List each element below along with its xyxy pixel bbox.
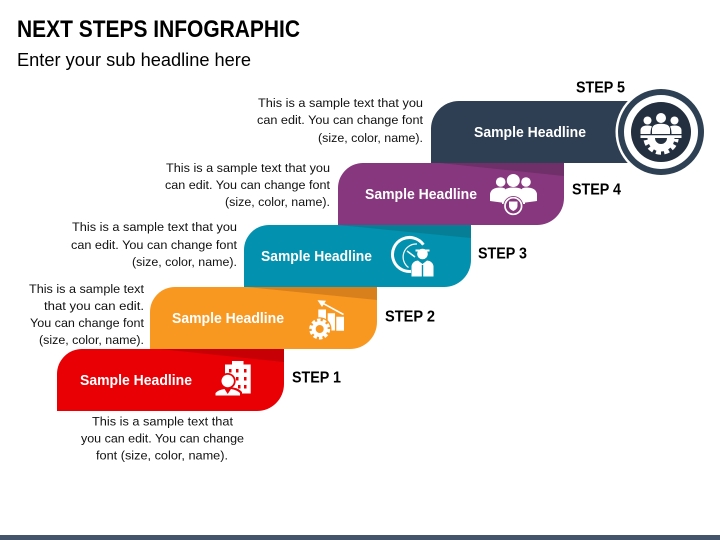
step 3 description: (size, color, name). (132, 255, 237, 269)
step 1 description: This is a sample text that (92, 414, 234, 428)
step 4 panel (338, 163, 564, 225)
step 2 bar (150, 287, 377, 349)
step 4 headline: Sample Headline (365, 186, 477, 203)
step 5 badge icon: team and gear (616, 86, 706, 178)
step 5 description: This is a sample text that you (258, 96, 423, 110)
step 3 bar (244, 225, 471, 287)
step 4 shade (440, 163, 564, 176)
step 3 shade (338, 225, 471, 238)
step 3 icon: person with gauge (392, 237, 434, 276)
subtitle: Enter your sub headline here (17, 50, 251, 70)
step 5 panel (431, 86, 706, 178)
step 2 description: You can change font (30, 316, 145, 330)
step 4 bar (338, 163, 564, 225)
step 1 description (81, 414, 244, 462)
step 3 panel (244, 225, 471, 287)
footer bar (0, 535, 720, 540)
step 1 description: font (size, color, name). (96, 448, 228, 462)
step 2 headline: Sample Headline (172, 310, 284, 327)
step 5 description (257, 96, 424, 145)
title: NEXT STEPS INFOGRAPHIC (17, 16, 300, 43)
step 3 description (71, 220, 238, 269)
step 1 label: STEP 1 (292, 370, 341, 386)
step 5 label: STEP 5 (576, 80, 625, 96)
step 3 description: can edit. You can change font (71, 238, 238, 252)
step 1 description: you can edit. You can change (81, 432, 244, 446)
step 2 label: STEP 2 (385, 308, 435, 326)
step 2 shade (247, 287, 377, 300)
step 4 description: can edit. You can change font (165, 178, 331, 192)
step 3 headline: Sample Headline (261, 248, 372, 265)
step 2 description: that you can edit. (44, 299, 144, 313)
step 1 panel (57, 349, 284, 411)
step 1 shade (160, 349, 284, 362)
step 4 icon: team with shield (490, 174, 537, 216)
step 3 description: This is a sample text that you (72, 220, 237, 234)
step 3 label: STEP 3 (478, 246, 527, 262)
step 4 description: (size, color, name). (225, 195, 330, 209)
gear, lower half only (644, 138, 679, 155)
step 4 label: STEP 4 (572, 182, 621, 198)
step 4 description (165, 161, 331, 209)
step 2 description: (size, color, name). (39, 333, 144, 347)
step 5 headline: Sample Headline (474, 124, 586, 141)
step 5 description: can edit. You can change font (257, 113, 424, 127)
step 4 description: This is a sample text that you (166, 161, 330, 175)
step 5 description: (size, color, name). (318, 131, 423, 145)
step 2 description: This is a sample text (29, 282, 145, 296)
step 1 bar (57, 349, 284, 411)
step 1 headline: Sample Headline (80, 372, 192, 389)
step 2 icon: bars, arrow and gear (308, 300, 344, 341)
step 1 icon: person and building (214, 361, 251, 397)
step 2 description (29, 282, 145, 347)
step 2 panel (150, 287, 377, 349)
step 5 bar (431, 101, 640, 163)
